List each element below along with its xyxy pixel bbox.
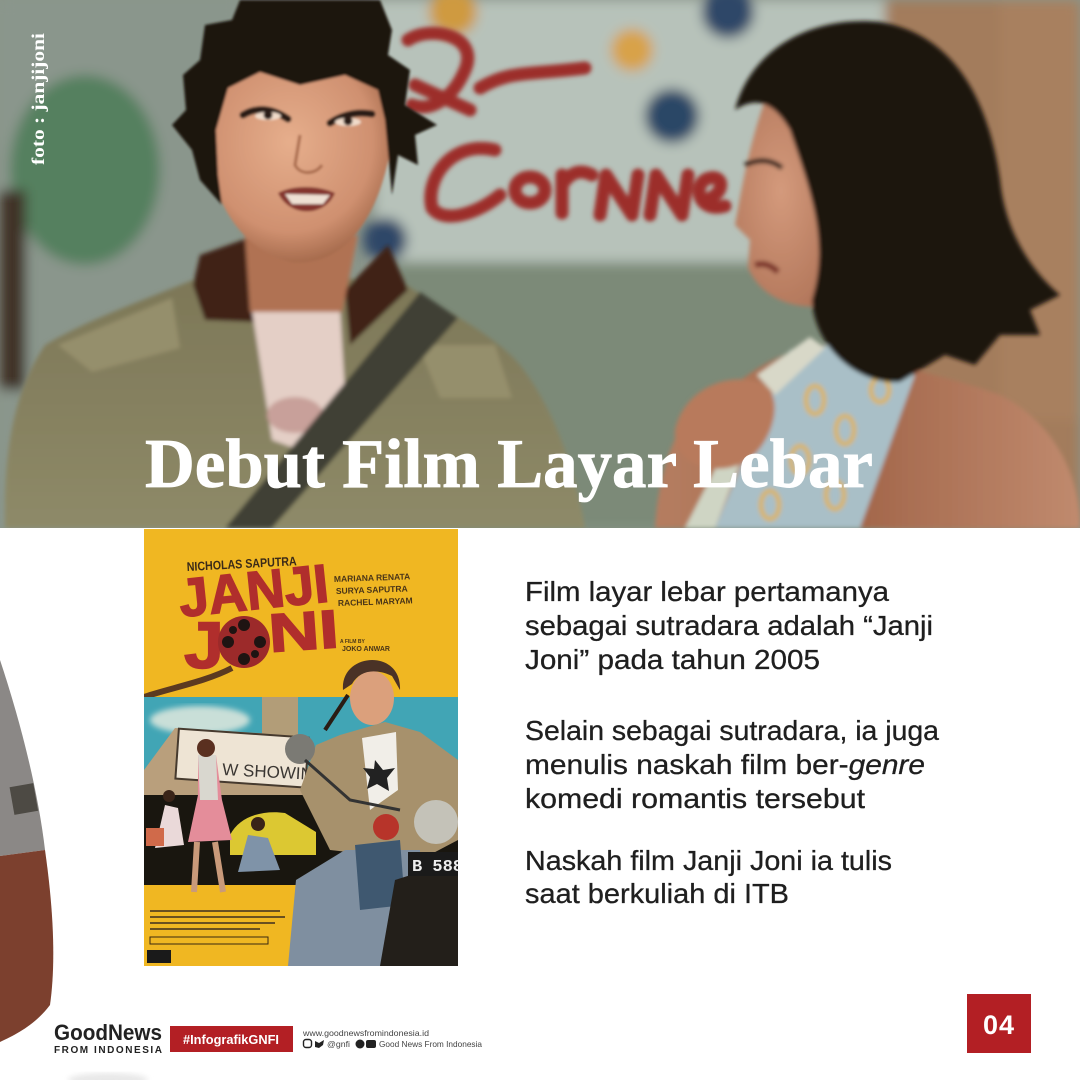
soft shadow at page bottom xyxy=(68,1073,148,1080)
poster: rider on motorbike xyxy=(285,660,463,966)
paragraph 1: Film layar lebar pertamanya xyxy=(525,576,889,607)
poster: ground xyxy=(144,795,458,885)
poster: cast and director: MARIANA RENATA xyxy=(334,571,410,584)
photo credit: foto : janjijoni xyxy=(28,33,48,165)
footer logo: GoodNews from Indonesia xyxy=(54,1020,162,1056)
poster: actor names: NICHOLAS SAPUTRA xyxy=(186,554,297,574)
poster: credit block xyxy=(147,910,285,963)
poster: cast and director: RACHEL MARYAM xyxy=(338,595,413,608)
paragraph 3 xyxy=(525,845,892,909)
footer logo: GoodNews from Indonesia: GoodNews xyxy=(54,1020,162,1045)
poster: women xyxy=(146,739,280,892)
hashtag badge: #InfografikGNFI xyxy=(183,1032,279,1047)
paragraph 1: Joni” pada tahun 2005 xyxy=(525,644,820,675)
poster: film title: J xyxy=(184,608,224,682)
paragraph 2: komedi romantis tersebut xyxy=(525,783,865,814)
poster: cast and director: JOKO ANWAR xyxy=(342,646,390,653)
paragraph 2 xyxy=(525,715,939,814)
poster: rider on motorbike: B 588 xyxy=(412,858,463,877)
poster: cast and director: A FILM BY xyxy=(340,639,365,645)
footer logo: GoodNews from Indonesia: FROM INDONESIA xyxy=(54,1045,162,1056)
paragraph 1: sebagai sutradara adalah “Janji xyxy=(525,610,933,641)
poster: teal sky scene xyxy=(144,697,458,770)
title: Debut Film Layar Lebar xyxy=(145,426,873,503)
movie poster xyxy=(144,529,463,966)
poster: cast and director xyxy=(334,571,413,653)
social links: @gnfi xyxy=(327,1039,350,1049)
page number badge: 04 xyxy=(983,1010,1015,1040)
paragraph 1 xyxy=(525,576,933,675)
paragraph 2: menulis naskah film ber- genre xyxy=(525,749,925,780)
social links: Good News From Indonesia xyxy=(379,1039,482,1049)
paragraph 3: saat berkuliah di ITB xyxy=(525,878,789,909)
page number badge xyxy=(967,994,1031,1053)
poster: film title: JANJI xyxy=(176,554,331,629)
man: head and hair xyxy=(172,0,437,262)
man: jacket xyxy=(5,235,585,528)
poster: film title: NI xyxy=(267,599,341,664)
poster: film reel xyxy=(144,616,270,697)
poster: cinema sign xyxy=(175,729,327,788)
photo: film still background xyxy=(0,0,1080,530)
social links xyxy=(302,1028,482,1049)
body text xyxy=(525,576,939,909)
poster: cinema sign: W SHOWING xyxy=(222,760,327,784)
paragraph 2: Selain sebagai sutradara, ia juga xyxy=(525,715,939,746)
poster: film title xyxy=(180,564,336,670)
poster: cast and director: SURYA SAPUTRA xyxy=(336,583,408,596)
sign script lettering xyxy=(408,33,725,216)
paragraph 3: Naskah film Janji Joni ia tulis xyxy=(525,845,892,876)
woman: hair and figure xyxy=(655,21,1080,528)
hashtag badge xyxy=(170,1026,293,1052)
social links: www.goodnewsfromindonesia.id xyxy=(302,1028,429,1038)
poster: taxi xyxy=(230,812,316,855)
person arm cutout at left edge xyxy=(0,660,53,1042)
